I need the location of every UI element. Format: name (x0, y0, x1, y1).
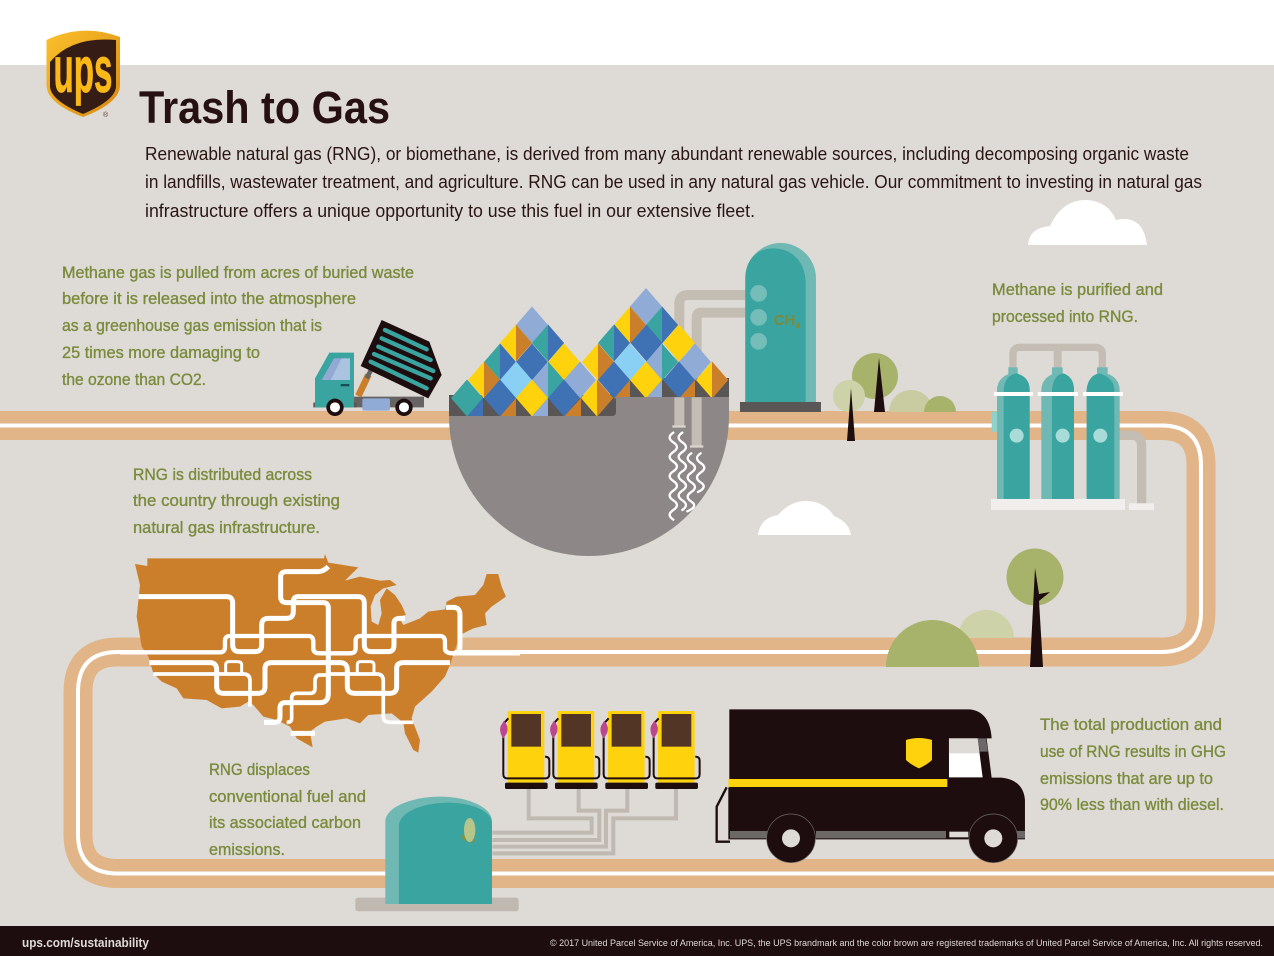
text: purification: processed into RNG. (992, 308, 1138, 326)
text: emissions result: 90% less than with diesel. (1040, 796, 1224, 814)
road with white centre line (0, 426, 1274, 874)
RNG storage tank with leaf (355, 797, 519, 911)
text: methane capture (62, 264, 414, 389)
UPS delivery van (717, 709, 1025, 863)
intro paragraph: Renewable natural gas (RNG), or biomethane, is derived from many abundant renewable sources, including decomposing organic waste (145, 143, 1189, 164)
pump 2 (550, 711, 599, 789)
pump 4 (650, 711, 700, 789)
text: distribution: natural gas infrastructure. (133, 519, 320, 537)
text: emissions result (1040, 716, 1226, 814)
footer bar (0, 926, 1274, 956)
text: emissions result: use of RNG results in GHG (1040, 743, 1226, 761)
trees and bushes by tank (833, 353, 956, 441)
large tree and bushes (886, 548, 1064, 667)
intro paragraph: infrastructure offers a unique opportunity to use this fuel in our extensive fleet. (145, 200, 755, 221)
UPS shield logo: ® (103, 111, 109, 119)
text: fuel displacement: conventional fuel and (209, 788, 366, 806)
title: Trash to Gas (139, 82, 390, 133)
CH4 storage tank: 4 (795, 320, 800, 330)
dump truck (313, 320, 442, 416)
text: methane capture: as a greenhouse gas emission that is (62, 317, 322, 335)
text: distribution: RNG is distributed across (133, 466, 312, 484)
text: fuel displacement: emissions. (209, 841, 285, 859)
UPS shield logo (46, 31, 120, 119)
footer bar: ups.com/sustainability (22, 936, 149, 950)
text: purification: Methane is purified and (992, 281, 1163, 299)
pump 1 (500, 711, 549, 789)
cloud: top right (1028, 200, 1147, 245)
text: emissions result: The total production and (1040, 716, 1222, 734)
waste pile: diamond mosaic (449, 288, 729, 417)
intro paragraph: in landfills, wastewater treatment, and agriculture. RNG can be used in any natural gas vehicle. Our commitment to investing in natural gas (145, 171, 1202, 192)
pump 3 (600, 711, 650, 789)
gas pipes to storage tank (679, 295, 750, 400)
text: methane capture: before it is released into the atmosphere (62, 290, 356, 308)
UPS shield logo: ups (54, 33, 112, 106)
footer bar: © 2017 United Parcel Service of America, Inc. UPS, the UPS brandmark and the color brown are registered trademarks of United Parcel Service of America, Inc. All rights reserved. (550, 938, 1263, 948)
text: methane capture: the ozone than CO2. (62, 371, 206, 389)
text: purification (992, 281, 1163, 326)
underground wells with rising gas (670, 397, 704, 520)
text: fuel displacement: RNG displaces (209, 761, 310, 779)
text: distribution: the country through existing (133, 492, 340, 510)
text: methane capture: Methane gas is pulled from acres of buried waste (62, 264, 414, 282)
landfill mound cross-section (449, 397, 729, 556)
text: fuel displacement (209, 761, 366, 859)
intro paragraph (145, 143, 1202, 221)
CH4 storage tank: CH (774, 312, 795, 329)
text: emissions result: emissions that are up to (1040, 770, 1213, 788)
text: distribution (133, 466, 340, 537)
CH4 storage tank (740, 243, 821, 412)
icon: leaf (461, 818, 480, 843)
text: fuel displacement: its associated carbon (209, 814, 361, 832)
purification cylinders (991, 347, 1154, 510)
text: methane capture: 25 times more damaging to (62, 344, 260, 362)
US map with pipeline network (120, 554, 520, 753)
cloud: centre (758, 501, 851, 535)
fuel pumps (492, 711, 700, 853)
